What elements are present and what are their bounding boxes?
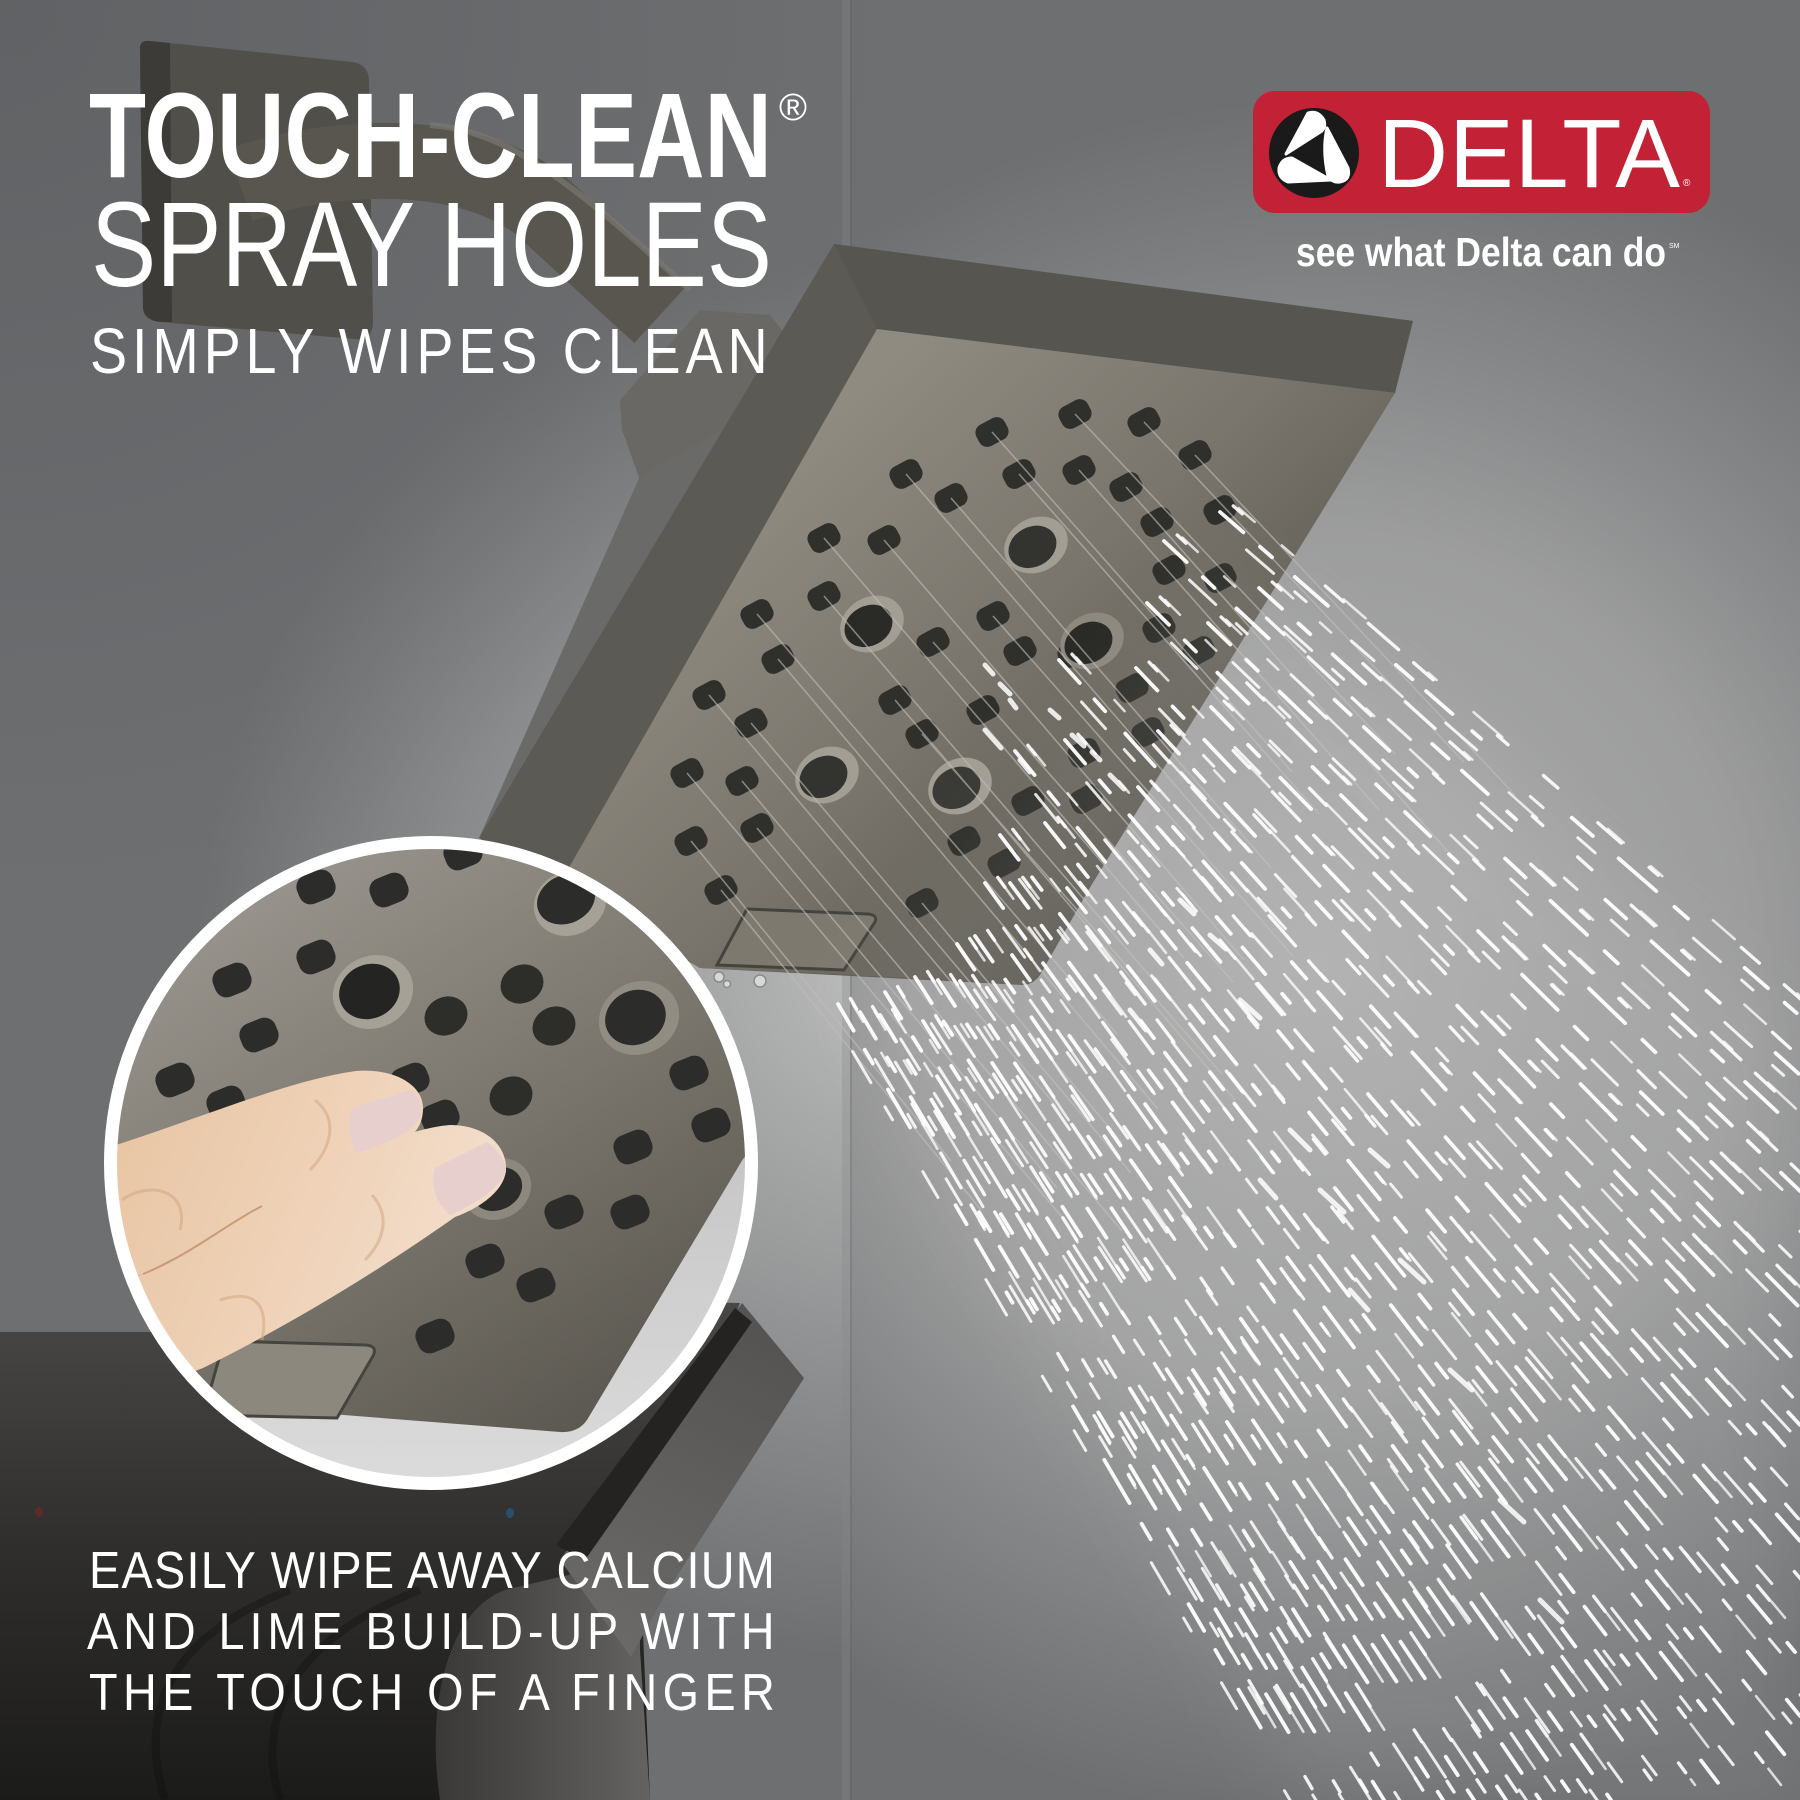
spray streak layers <box>829 497 1800 1800</box>
magnified circle inset <box>90 820 780 1500</box>
inset round nozzles <box>424 964 576 1116</box>
title: Touch-Clean: TOUCH-CLEAN <box>89 67 772 203</box>
wordmark registered: ® <box>1683 178 1691 189</box>
large spray holes <box>785 506 1134 825</box>
water droplets <box>714 972 766 988</box>
service mark: SM <box>1669 243 1680 250</box>
lever handle <box>560 1303 804 1657</box>
head bevel frame <box>479 244 1413 985</box>
thin water trails from nozzles <box>687 414 1515 1231</box>
Delta logo <box>1253 91 1710 275</box>
inset tab <box>203 1341 374 1418</box>
inset shower plate <box>118 849 745 1432</box>
inset nozzles <box>152 832 734 1357</box>
trim plate <box>0 1300 740 1800</box>
triangle emblem <box>1269 108 1359 198</box>
hot and cold markers <box>35 1507 43 1517</box>
fingers <box>117 1070 506 1371</box>
top bevel <box>834 244 1413 393</box>
handle knob <box>436 1558 650 1800</box>
white ring <box>110 842 752 1484</box>
red badge <box>1253 91 1710 213</box>
subtitle: SIMPLY WIPES CLEAN <box>90 315 768 387</box>
head face <box>563 329 1395 983</box>
lever tab <box>717 909 876 970</box>
inset large holes <box>321 858 691 1231</box>
registered mark: ® <box>779 87 807 129</box>
body copy: EASILY WIPE AWAY CALCIUM <box>89 1542 775 1600</box>
body copy: THE TOUCH OF A FINGER <box>89 1664 775 1722</box>
wall flange and shower arm <box>140 41 690 339</box>
head back body <box>620 310 790 480</box>
body copy <box>87 1542 775 1722</box>
wordmark: DELTA <box>1378 99 1680 208</box>
bright bubbly streams on head <box>985 665 1562 1622</box>
tagline: see what Delta can do <box>1296 229 1666 275</box>
temperature valve and lever <box>0 1300 804 1800</box>
shower head <box>479 244 1413 988</box>
fingernails <box>349 1090 421 1153</box>
water spray <box>829 497 1800 1800</box>
title: Spray Holes: SPRAY HOLES <box>91 176 772 312</box>
spray nozzles <box>667 396 1240 921</box>
body copy: AND LIME BUILD-UP WITH <box>87 1603 775 1661</box>
